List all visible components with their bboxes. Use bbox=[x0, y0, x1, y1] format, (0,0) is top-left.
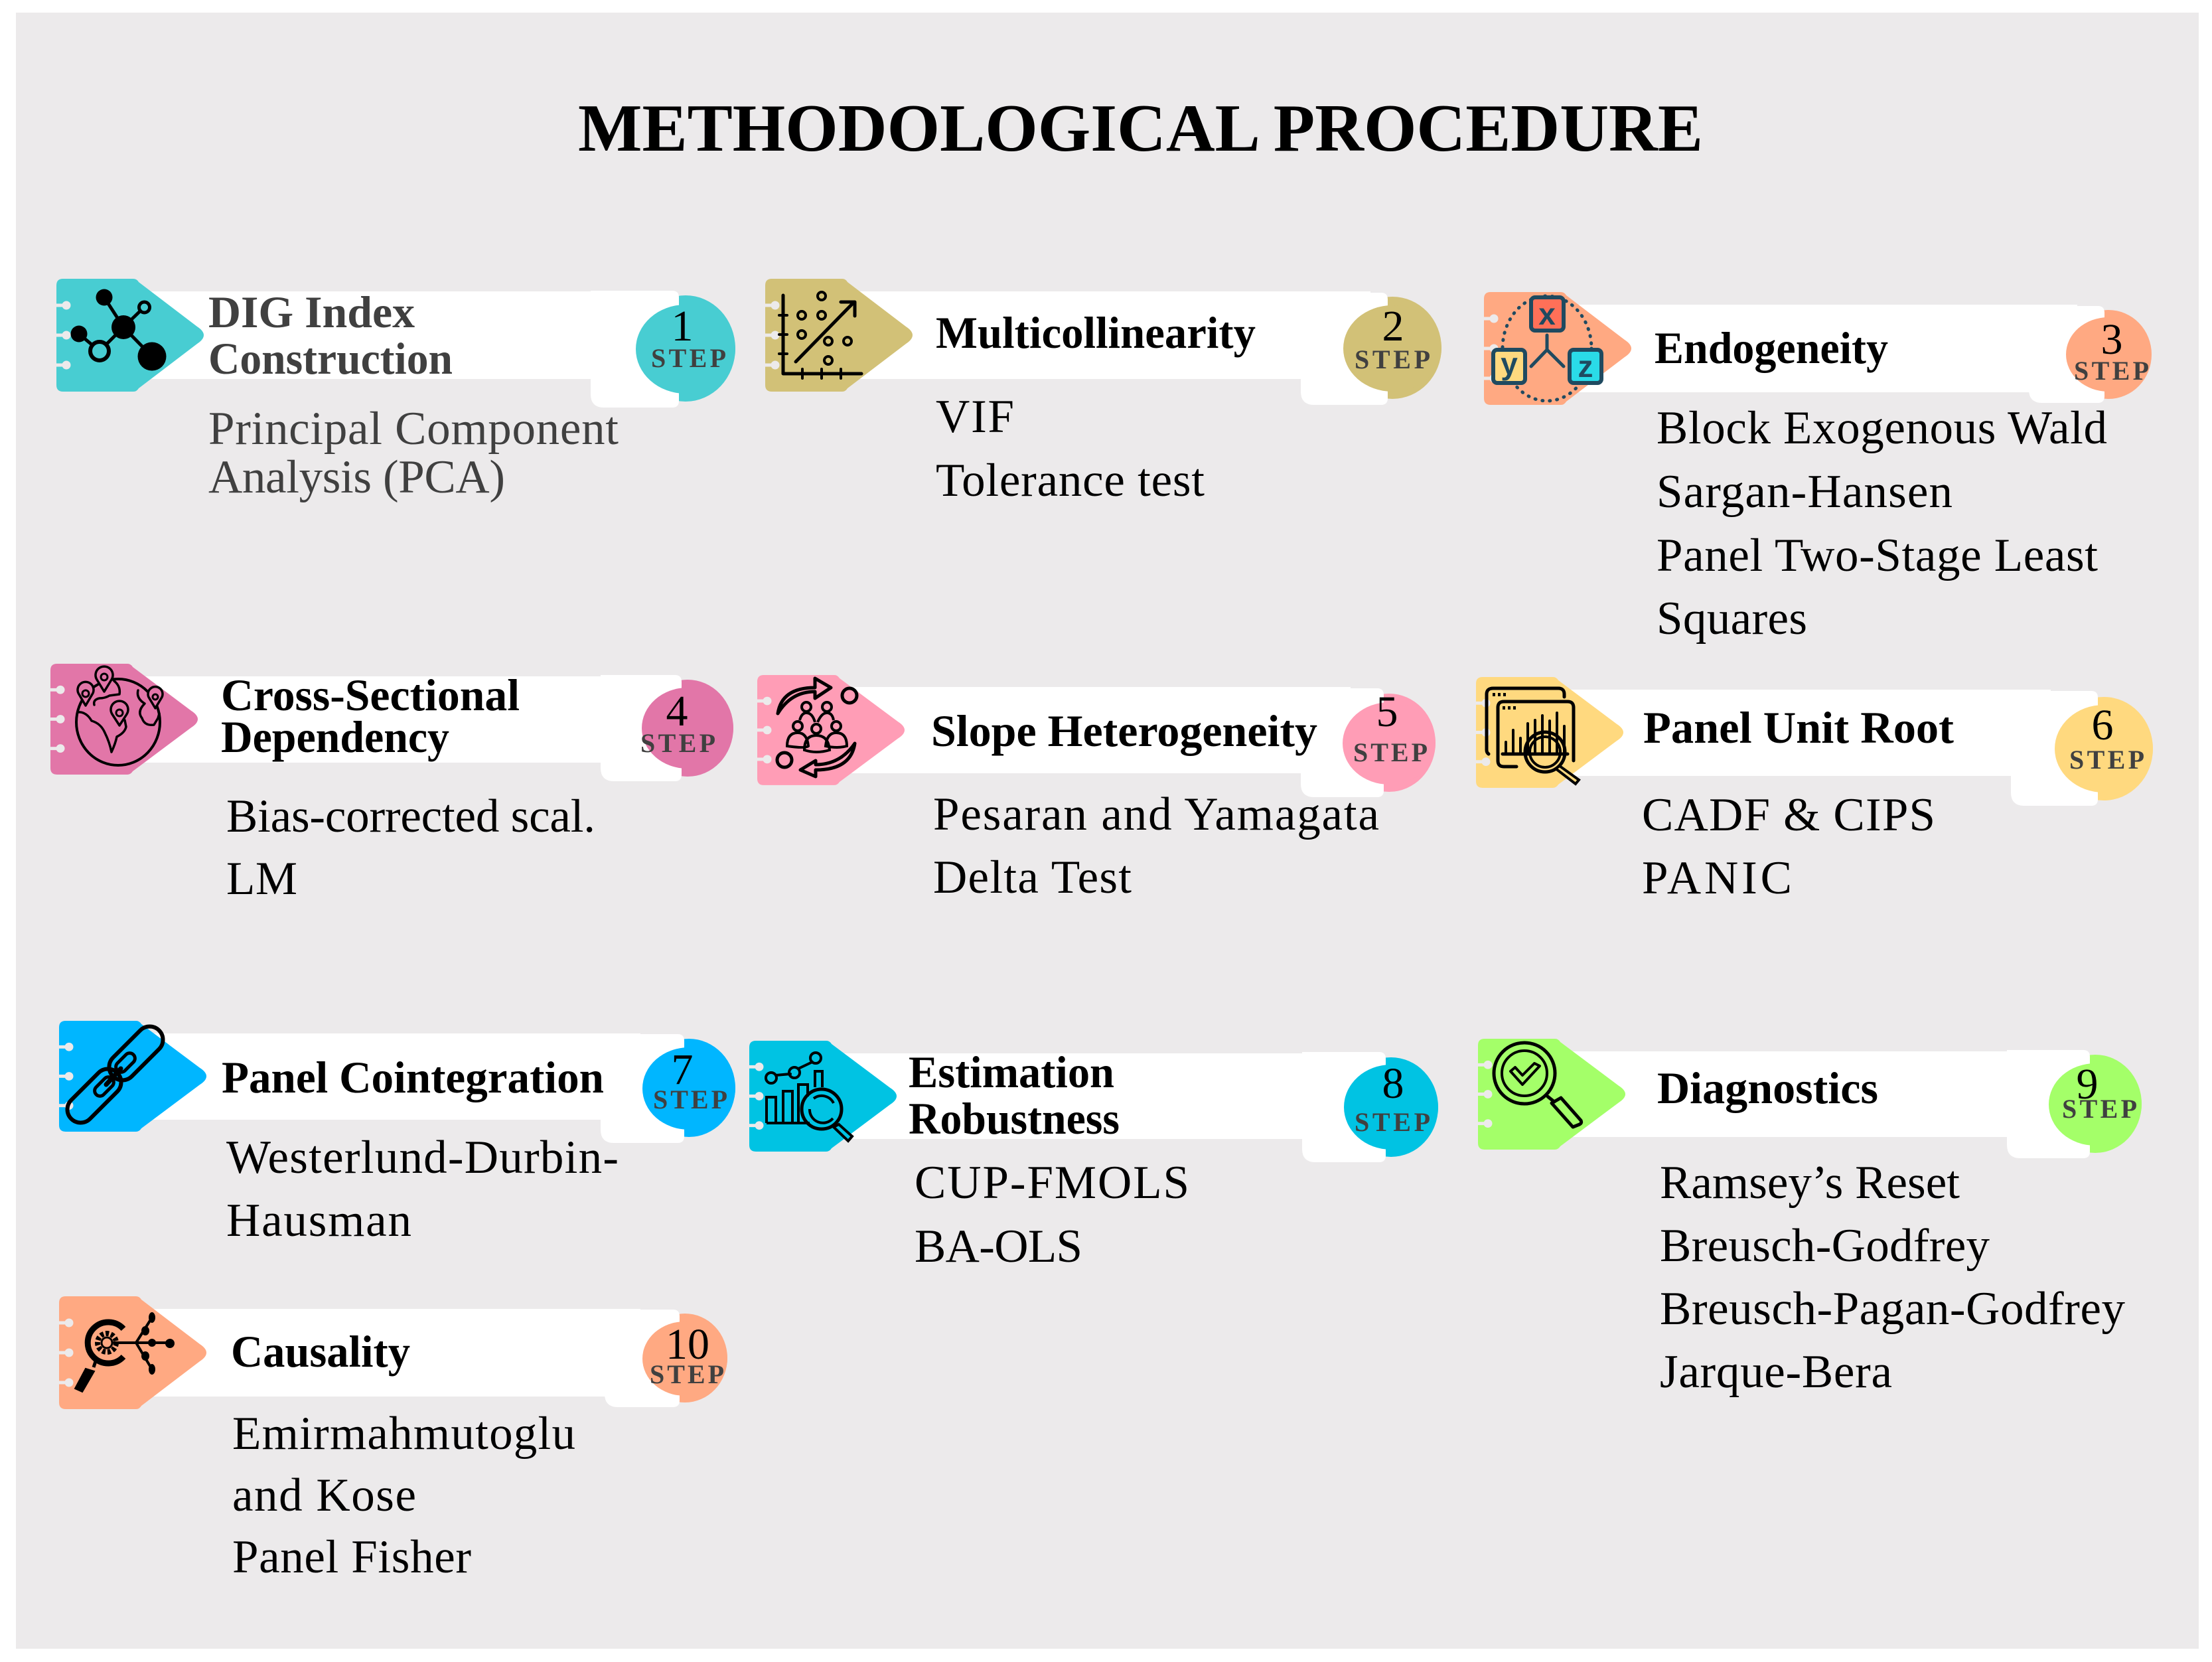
step badge 10: 10 bbox=[666, 1320, 709, 1369]
step badge 1 bbox=[591, 291, 735, 408]
pennant with people and arrows icon bbox=[757, 675, 905, 785]
methods list: Ramsey’s Reset bbox=[1660, 1157, 1960, 1209]
step badge 7 bbox=[601, 1034, 735, 1143]
step 6 card: Panel Unit Root bbox=[1476, 677, 2153, 904]
step 1 card: DIG Index Construction bbox=[56, 279, 735, 503]
methods list: LM bbox=[226, 853, 297, 905]
pennant with chain icon bbox=[59, 1021, 206, 1132]
methods list bbox=[936, 391, 1205, 506]
methods list: Tolerance test bbox=[936, 455, 1205, 506]
step 3 card: Endogeneity bbox=[1484, 292, 2152, 644]
methods list: Bias-corrected scal. bbox=[226, 791, 595, 842]
methods list: CADF & CIPS bbox=[1642, 789, 1935, 841]
pennant with xyz icon bbox=[1484, 292, 1631, 405]
step badge 3: 3 bbox=[2101, 315, 2122, 364]
heading: Dependency bbox=[221, 712, 449, 762]
methods list: Breusch-Godfrey bbox=[1660, 1220, 1990, 1272]
methods list bbox=[226, 1132, 619, 1246]
heading: Construction bbox=[208, 333, 453, 384]
heading: Robustness bbox=[909, 1093, 1120, 1144]
step badge 5: STEP bbox=[1353, 737, 1428, 767]
header band bbox=[1553, 690, 2051, 776]
step badge 2: 2 bbox=[1382, 302, 1404, 350]
heading bbox=[221, 670, 520, 762]
step badge 1: STEP bbox=[651, 343, 726, 373]
step badge 7: 7 bbox=[672, 1045, 693, 1094]
methods list: Sargan-Hansen bbox=[1657, 466, 1953, 518]
header band bbox=[840, 291, 1370, 379]
methods list: Emirmahmutoglu bbox=[232, 1408, 575, 1460]
step badge 2: STEP bbox=[1355, 344, 1430, 374]
heading: Causality bbox=[231, 1326, 410, 1377]
methods list: Squares bbox=[1657, 593, 1807, 644]
pennant with xyz icon: y bbox=[1501, 346, 1518, 381]
header band bbox=[133, 291, 637, 379]
methods list bbox=[1660, 1157, 2125, 1398]
methods list: Breusch-Pagan-Godfrey bbox=[1660, 1283, 2125, 1335]
methods list: VIF bbox=[936, 391, 1014, 443]
methods list: Jarque-Bera bbox=[1660, 1346, 1892, 1398]
step badge 5 bbox=[1301, 688, 1436, 797]
pennant with xyz icon: x bbox=[1538, 297, 1556, 331]
pennant with bars and magnifier icon bbox=[749, 1041, 897, 1152]
step badge 9: 9 bbox=[2076, 1060, 2099, 1108]
step badge 6: 6 bbox=[2092, 701, 2113, 749]
step badge 10: STEP bbox=[650, 1359, 724, 1389]
methods list: Westerlund-Durbin- bbox=[226, 1132, 619, 1183]
header band bbox=[126, 676, 630, 763]
pennant with network icon bbox=[56, 279, 204, 392]
methods list: Panel Fisher bbox=[232, 1531, 471, 1583]
step badge 4: STEP bbox=[640, 728, 715, 758]
methods list: Hausman bbox=[226, 1195, 411, 1246]
heading: Panel Unit Root bbox=[1643, 702, 1954, 753]
step 8 card: Estimation Robustness bbox=[749, 1041, 1438, 1272]
step badge 1: 1 bbox=[672, 302, 693, 350]
step badge 6: STEP bbox=[2069, 745, 2144, 775]
header band bbox=[136, 1309, 640, 1397]
step 5 card: Slope Heterogeneity bbox=[757, 675, 1436, 903]
step badge 6 bbox=[2011, 691, 2153, 806]
methods list: BA-OLS bbox=[915, 1221, 1082, 1272]
step 2 card: Multicollinearity bbox=[765, 279, 1441, 506]
pennant with globe icon bbox=[50, 664, 198, 775]
heading: DIG Index bbox=[208, 287, 415, 337]
methods list: Block Exogenous Wald bbox=[1657, 402, 2107, 454]
step badge 8: 8 bbox=[1382, 1059, 1404, 1108]
heading: Endogeneity bbox=[1655, 323, 1888, 373]
heading: Diagnostics bbox=[1657, 1063, 1878, 1113]
step badge 3: STEP bbox=[2074, 356, 2149, 386]
methods list bbox=[915, 1157, 1189, 1272]
methods list: Pesaran and Yamagata bbox=[933, 789, 1379, 840]
step badge 8: STEP bbox=[1355, 1107, 1430, 1137]
step badge 8 bbox=[1302, 1052, 1438, 1162]
header band bbox=[833, 687, 1351, 773]
methods list: Principal Component bbox=[208, 403, 619, 455]
header band bbox=[1553, 1051, 2037, 1137]
heading bbox=[208, 287, 453, 384]
step badge 2 bbox=[1301, 293, 1441, 405]
methods list: CUP-FMOLS bbox=[915, 1157, 1189, 1209]
methods list bbox=[1657, 402, 2107, 644]
heading: Multicollinearity bbox=[936, 307, 1256, 358]
step badge 4 bbox=[601, 675, 733, 781]
step badge 9 bbox=[2007, 1050, 2142, 1158]
step badge 9: STEP bbox=[2062, 1094, 2137, 1124]
pennant with target and magnifier icon bbox=[59, 1296, 206, 1409]
methods list: Delta Test bbox=[933, 852, 1132, 903]
pennant with chart window and magnifier icon bbox=[1476, 677, 1623, 788]
step badge 5: 5 bbox=[1376, 688, 1398, 736]
title: METHODOLOGICAL PROCEDURE bbox=[578, 91, 1703, 166]
methods list bbox=[226, 791, 595, 905]
methods list: and Kose bbox=[232, 1470, 416, 1521]
step 7 card: Panel Cointegration bbox=[59, 1021, 735, 1246]
heading: Estimation bbox=[909, 1047, 1114, 1097]
header band bbox=[136, 1033, 640, 1120]
header band bbox=[1560, 305, 2077, 392]
methods list: Analysis (PCA) bbox=[208, 451, 505, 503]
pennant with xyz icon: z bbox=[1578, 349, 1593, 384]
step badge 4: 4 bbox=[666, 687, 688, 735]
heading: Slope Heterogeneity bbox=[931, 706, 1317, 756]
step badge 10 bbox=[605, 1310, 727, 1407]
methods list bbox=[232, 1408, 575, 1583]
pennant with magnifier check icon bbox=[1478, 1039, 1625, 1150]
methods list bbox=[208, 403, 619, 503]
methods list bbox=[1642, 789, 1935, 904]
step badge 3 bbox=[2029, 306, 2152, 403]
methods list: PANIC bbox=[1642, 852, 1792, 904]
methods list: Panel Two-Stage Least bbox=[1657, 530, 2098, 581]
step 9 card: Diagnostics bbox=[1478, 1039, 2142, 1398]
pennant with scatter plot icon bbox=[765, 279, 913, 392]
methods list bbox=[933, 789, 1379, 903]
step 10 card: Causality bbox=[59, 1296, 727, 1583]
step badge 7: STEP bbox=[653, 1085, 727, 1114]
heading: Cross-Sectional bbox=[221, 670, 520, 720]
heading: Panel Cointegration bbox=[222, 1052, 604, 1102]
step 4 card: Cross-Sectional Dependency bbox=[50, 664, 733, 905]
header band bbox=[825, 1053, 1329, 1139]
heading bbox=[909, 1047, 1120, 1144]
